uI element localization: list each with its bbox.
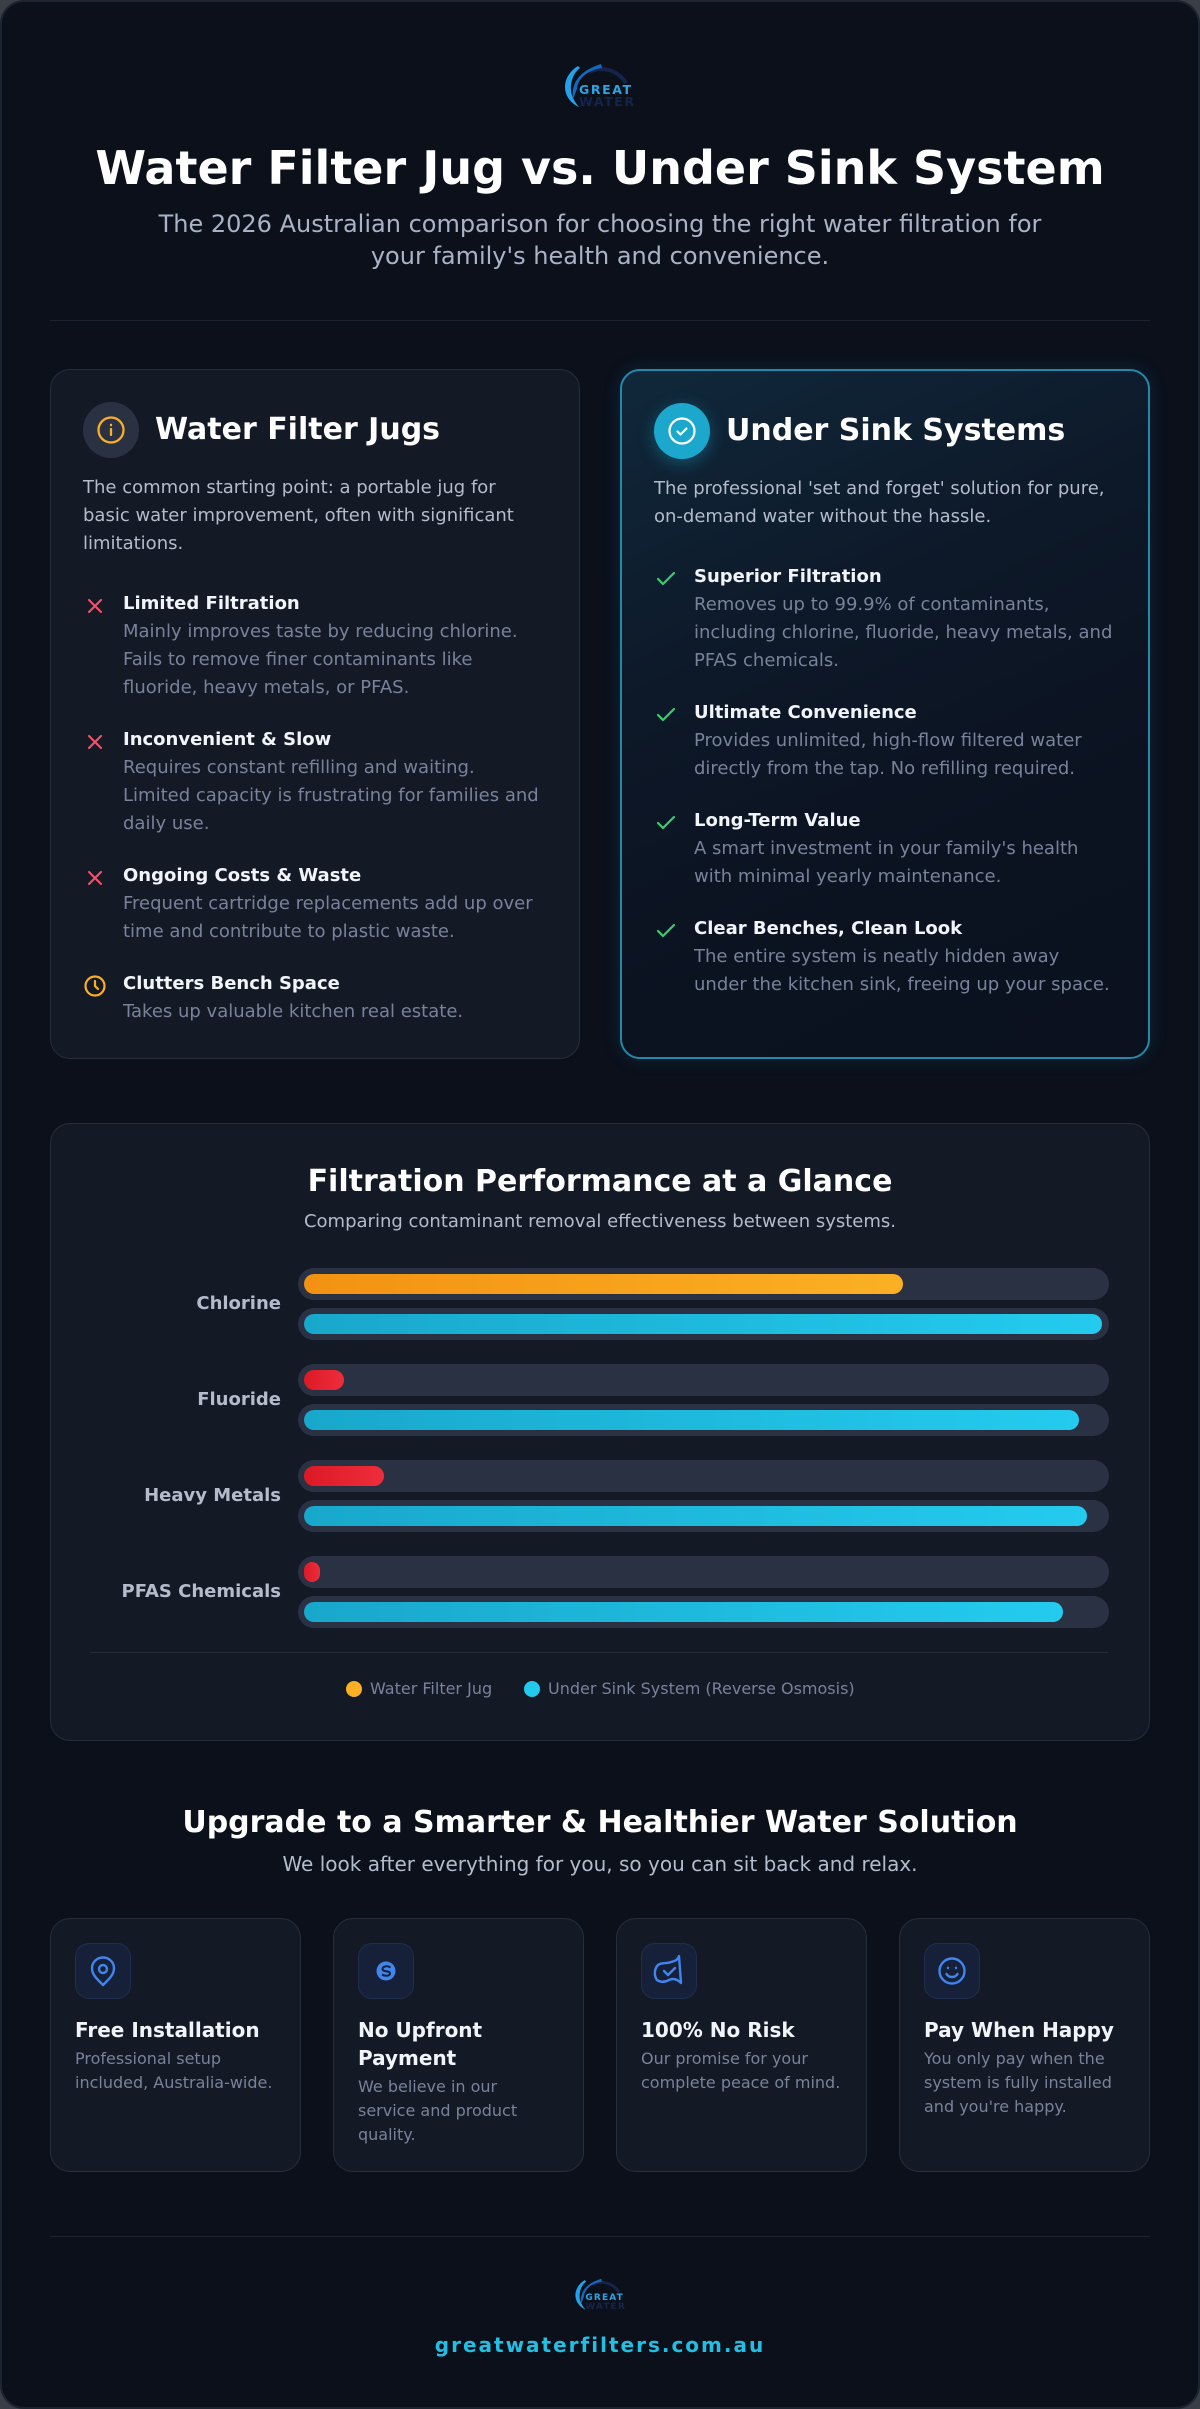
item: superior filtration: Superior Filtration: [694, 566, 882, 587]
intro text: basic water improvement, often with significant: [83, 505, 514, 526]
upgrade subtitle: We look after everything for you, so you can sit back and relax.: [282, 1852, 918, 1876]
chart row: heavy metals: Heavy Metals: [144, 1485, 281, 1506]
intro text: The professional 'set and forget' solution for pure,: [654, 478, 1105, 499]
card text: system is fully installed: [924, 2073, 1112, 2092]
panel: water filter jugs: [50, 369, 580, 1059]
item: long-term value: A smart investment in your family's health: [694, 838, 1078, 859]
item: ongoing costs and waste: time and contribute to plastic waste.: [123, 921, 455, 942]
card title: Pay When Happy: [924, 2018, 1114, 2042]
card title: Payment: [358, 2046, 456, 2070]
chart heading: Filtration Performance at a Glance: [308, 1164, 892, 1199]
card text: [924, 2049, 1112, 2116]
item: clear benches: Clear Benches, Clean Look: [694, 918, 962, 939]
item: clutters bench space: [84, 973, 463, 1022]
item: ongoing costs and waste: Frequent cartridge replacements add up over: [123, 893, 533, 914]
item: ultimate convenience: Provides unlimited, high-flow filtered water: [694, 730, 1082, 751]
item: limited filtration: Limited Filtration: [123, 593, 300, 614]
logo: Great Water footer: [575, 2278, 626, 2311]
icon: smile: [924, 1943, 980, 1999]
icon: map pin: [75, 1943, 131, 1999]
panel: under sink systems: [620, 369, 1150, 1059]
chart row: fluoride: [197, 1364, 1109, 1436]
item: long-term value: Long-Term Value: [694, 810, 861, 831]
intro text: [654, 478, 1105, 527]
card text: and you're happy.: [924, 2097, 1067, 2116]
card text: We believe in our: [358, 2077, 497, 2096]
card text: You only pay when the: [924, 2049, 1105, 2068]
chart row: pfas chemicals: [122, 1556, 1109, 1628]
chart row: chlorine: [196, 1268, 1109, 1340]
item: ultimate convenience: Ultimate Convenience: [694, 702, 917, 723]
card: free installation: [50, 1918, 301, 2172]
card text: [75, 2049, 272, 2092]
icon: shield check: [641, 1943, 697, 1999]
item: inconvenient and slow: Requires constant refilling and waiting.: [123, 757, 475, 778]
card: pay when happy: [899, 1918, 1150, 2172]
logo: Great Water top: GREAT: [579, 82, 633, 97]
chart legend: [346, 1679, 855, 1698]
intro text: on-demand water without the hassle.: [654, 506, 991, 527]
item: limited filtration: fluoride, heavy metals, or PFAS.: [123, 677, 409, 698]
item: superior filtration: including chlorine, fluoride, heavy metals, and: [694, 622, 1112, 643]
card text: complete peace of mind.: [641, 2073, 840, 2092]
card text: Our promise for your: [641, 2049, 808, 2068]
icon: coin: [358, 1943, 414, 1999]
item: limited filtration: [88, 593, 518, 698]
card title: Free Installation: [75, 2018, 260, 2042]
card title: [358, 2018, 482, 2070]
item: inconvenient and slow: Inconvenient & Slow: [123, 729, 331, 750]
chart legend: Water Filter Jug: [370, 1679, 492, 1698]
card text: Professional setup: [75, 2049, 221, 2068]
card: no upfront payment: [333, 1918, 584, 2172]
item: inconvenient and slow: daily use.: [123, 813, 209, 834]
item: ongoing costs and waste: Ongoing Costs & Waste: [123, 865, 361, 886]
heading: under sink systems: Under Sink Systems: [726, 413, 1065, 448]
item: inconvenient and slow: [88, 729, 539, 834]
item: clear benches: under the kitchen sink, freeing up your space.: [694, 974, 1110, 995]
logo: Great Water top: WATER: [579, 94, 635, 109]
logo: Great Water top: [565, 64, 635, 109]
item: clear benches: The entire system is neatly hidden away: [694, 946, 1059, 967]
item: long-term value: with minimal yearly maintenance.: [694, 866, 1001, 887]
card text: [641, 2049, 840, 2092]
item: superior filtration: [656, 566, 1112, 671]
title: Water Filter Jug vs. Under Sink System: [95, 141, 1105, 195]
footer url: greatwaterfilters.com.au: [435, 2333, 765, 2357]
item: superior filtration: PFAS chemicals.: [694, 650, 839, 671]
card text: [358, 2077, 517, 2144]
heading: water filter jugs: Water Filter Jugs: [155, 412, 440, 447]
card text: service and product: [358, 2101, 517, 2120]
subtitle: [158, 210, 1042, 270]
intro text: The common starting point: a portable jug for: [83, 477, 496, 498]
panel: filtration performance chart: [50, 1123, 1150, 1741]
card text: included, Australia-wide.: [75, 2073, 272, 2092]
item: inconvenient and slow: Limited capacity is frustrating for families and: [123, 785, 539, 806]
card: no risk: [616, 1918, 867, 2172]
item: ongoing costs and waste: [88, 865, 533, 942]
chart row: pfas chemicals: PFAS Chemicals: [122, 1581, 281, 1602]
chart row: fluoride: Fluoride: [197, 1389, 281, 1410]
item: long-term value: [656, 810, 1078, 887]
item: superior filtration: Removes up to 99.9% of contaminants,: [694, 594, 1049, 615]
intro text: [82, 477, 514, 554]
icon: info circle: [83, 402, 139, 458]
chart subtitle: Comparing contaminant removal effectiveness between systems.: [304, 1211, 896, 1232]
item: limited filtration: Mainly improves taste by reducing chlorine.: [123, 621, 518, 642]
card text: quality.: [358, 2125, 416, 2144]
item: clear benches: [656, 918, 1110, 995]
chart legend: Under Sink System (Reverse Osmosis): [548, 1679, 855, 1698]
chart row: chlorine: Chlorine: [196, 1293, 281, 1314]
logo: Great Water footer: GREAT: [585, 2293, 624, 2303]
card title: 100% No Risk: [641, 2018, 795, 2042]
subtitle: The 2026 Australian comparison for choosing the right water filtration for: [159, 210, 1041, 238]
item: clutters bench space: Clutters Bench Space: [123, 973, 340, 994]
intro text: limitations.: [83, 533, 183, 554]
item: ultimate convenience: directly from the tap. No refilling required.: [694, 758, 1075, 779]
item: limited filtration: Fails to remove finer contaminants like: [123, 649, 472, 670]
item: ultimate convenience: [656, 702, 1082, 779]
item: clutters bench space: Takes up valuable kitchen real estate.: [123, 1001, 463, 1022]
chart row: heavy metals: [144, 1460, 1109, 1532]
card title: No Upfront: [358, 2018, 482, 2042]
upgrade heading: Upgrade to a Smarter & Healthier Water Solution: [182, 1805, 1018, 1840]
icon: check circle: [654, 403, 710, 459]
subtitle: your family's health and convenience.: [371, 242, 829, 270]
